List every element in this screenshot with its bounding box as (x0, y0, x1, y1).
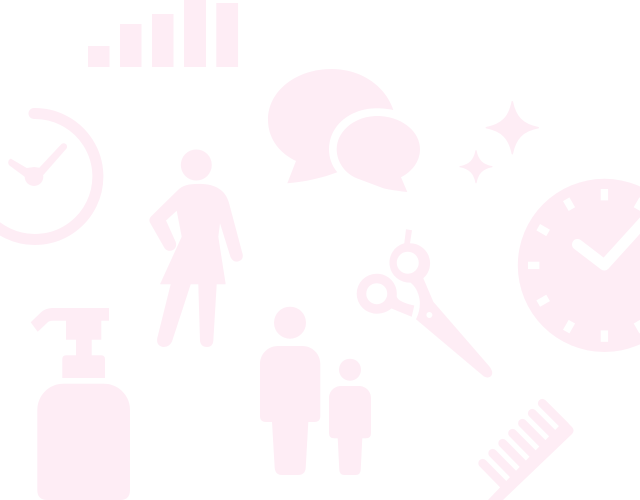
icon: speech bubbles (268, 69, 420, 192)
icon: solid clock (518, 179, 640, 352)
icon: bar chart (88, 0, 238, 67)
icon: scissors (357, 229, 492, 377)
icon: comb (483, 400, 574, 500)
icon: adult and child (260, 307, 371, 475)
child (329, 359, 371, 475)
icon: pump bottle (31, 308, 130, 500)
icon: woman (149, 150, 243, 347)
icon: large sparkle (486, 102, 538, 154)
icon: outline clock (0, 113, 98, 239)
adult (260, 307, 320, 475)
icon: small sparkle (460, 151, 492, 183)
